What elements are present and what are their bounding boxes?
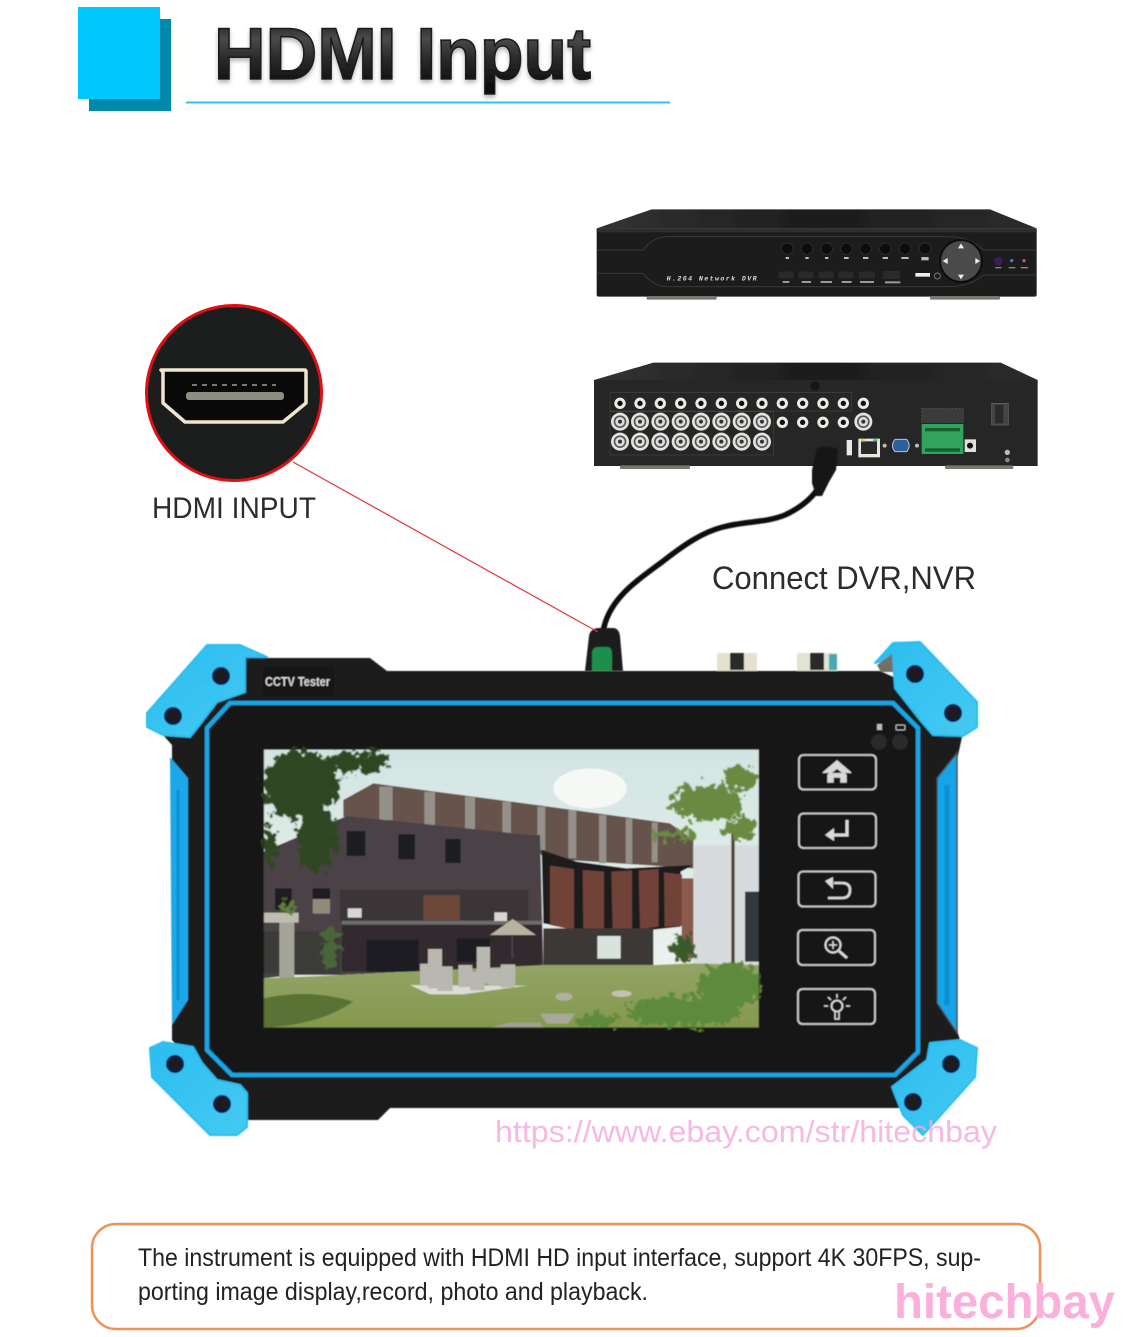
BNC connectors <box>611 413 872 451</box>
description box: The instrument is equipped with HDMI HD input interface, support 4K 30FPS, sup- <box>138 1244 981 1272</box>
label: Connect DVR,NVR: Connect DVR,NVR <box>712 560 976 596</box>
description box <box>92 1224 1040 1329</box>
button: home <box>799 755 876 790</box>
button: enter <box>799 814 876 848</box>
watermark: store URL: https://www.ebay.com/str/hitechbay <box>495 1114 998 1149</box>
button: return <box>798 872 876 906</box>
brand badge <box>263 666 334 696</box>
description box: porting image display,record, photo and playback. <box>138 1278 648 1306</box>
title: HDMI Input <box>214 14 591 95</box>
HDMI cable <box>603 447 838 632</box>
DVR front view <box>597 209 1037 300</box>
DVR front view: H.264 Network DVR <box>667 275 758 283</box>
side grips <box>170 753 957 1033</box>
header icon: cyan square <box>78 7 171 111</box>
bumper: bottom left <box>150 1042 247 1135</box>
indicator lights <box>871 724 908 750</box>
plug at DVR <box>812 447 838 496</box>
CCTV tester device <box>147 642 977 1135</box>
HDMI port magnifier <box>146 306 322 480</box>
label: HDMI INPUT: HDMI INPUT <box>152 492 316 525</box>
pointer line <box>293 462 598 632</box>
button: backlight <box>798 989 875 1024</box>
screen photo <box>262 749 762 1028</box>
bumper: top right <box>875 642 977 736</box>
device body <box>163 658 962 1120</box>
bumper: top left <box>147 645 267 737</box>
brand badge: CCTV Tester <box>265 675 330 689</box>
blue frame and bezel <box>207 703 918 1075</box>
RCA connectors <box>614 398 869 428</box>
watermark: hitechbay: hitechbay <box>894 1276 1115 1329</box>
connector plugged into tester <box>585 628 623 671</box>
bumper: bottom right <box>892 1040 977 1135</box>
title underline <box>186 102 670 104</box>
top connectors <box>717 653 837 671</box>
DVR rear view <box>594 363 1038 469</box>
button: zoom <box>798 930 875 965</box>
